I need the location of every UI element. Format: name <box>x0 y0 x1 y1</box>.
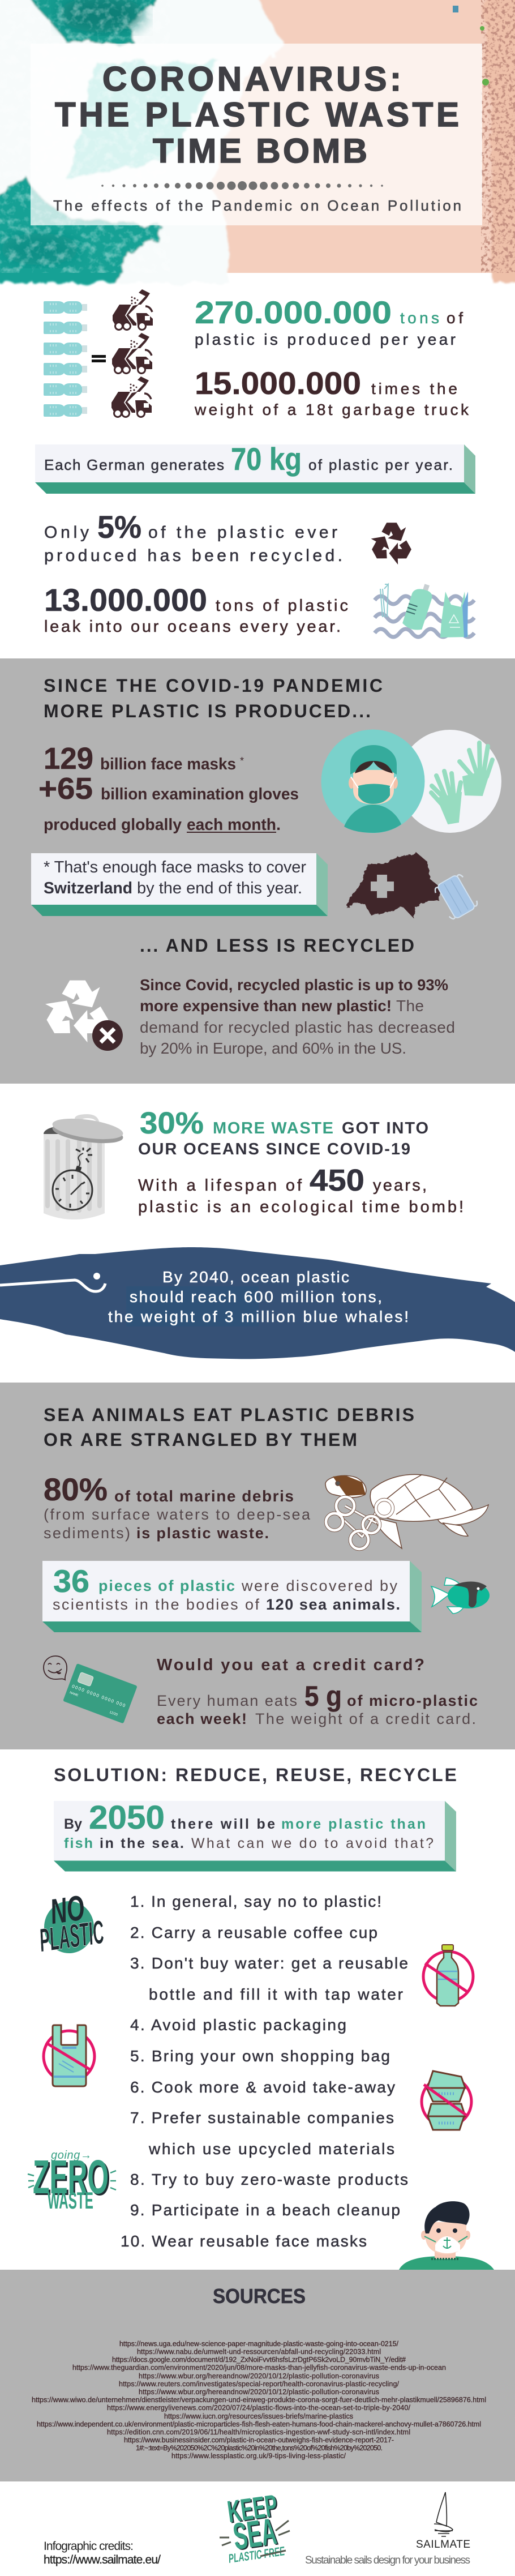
heading: solution: SOLUTION: REDUCE, REUSE, RECYCLE <box>54 1765 457 1785</box>
source links list: https://www.energylivenews.com/2020/07/24/plastic-flows-into-the-ocean-set-to-triple-by-2040/ <box>107 2404 411 2412</box>
text: 5 g of micro-plastic: of micro-plastic <box>347 1692 478 1709</box>
stat: 80% marine debris: sediments) <box>44 1525 130 1542</box>
callout: 36 pieces of plastic: were discovered by <box>241 1577 397 1594</box>
stat: face masks <box>44 742 244 776</box>
stat: 450 years: plastic is an ecological time bomb! <box>138 1198 464 1216</box>
panel: sources <box>0 2270 515 2481</box>
list: ten solution tips <box>121 1893 408 2250</box>
text: recycled plastic cost: more expensive than new plastic! <box>140 997 392 1015</box>
source links list: https://www.theguardian.com/environment/2020/jun/08/more-masks-than-jellyfish-coronavirus-waste-ends-up-in-ocean <box>72 2364 446 2372</box>
icon: going zero waste badge <box>28 2149 116 2214</box>
text: produced globally: each month <box>187 816 276 834</box>
text: infographic credits: Infographic credits: <box>44 2540 134 2553</box>
list: ten solution tips: which use upcycled materials <box>148 2140 394 2158</box>
equals sign <box>92 355 106 362</box>
list: ten solution tips: 3. Don't buy water: get a reusable <box>130 1954 408 1972</box>
text: produced globally: produced globally <box>44 816 182 834</box>
icon: turtle in plastic rings <box>325 1474 488 1549</box>
stat: 450 years <box>138 1163 464 1216</box>
source links list: https://www.wbur.org/hereandnow/2020/10/12/plastic-pollution-coronavirus <box>139 2388 379 2396</box>
icon: no take-away boxes <box>422 2071 471 2130</box>
text: produced globally: . <box>276 816 281 834</box>
heading: and less is recycled: ... AND LESS IS RECYCLED <box>140 935 414 956</box>
stat: 30% more waste: GOT INTO <box>342 1119 428 1137</box>
stat: 80% marine debris <box>44 1471 311 1542</box>
icon: going zero waste badge: ZERO <box>33 2150 109 2203</box>
callout: 36 pieces of plastic: pieces of plastic <box>98 1577 235 1594</box>
source links list: https://www.reuters.com/investigates/special-report/health-coronavirus-plastic-recycling/ <box>119 2380 400 2388</box>
text: recycled plastic cost: Since Covid, recycled plastic is up to 93% <box>140 976 448 994</box>
text: 5 g of micro-plastic <box>157 1680 478 1727</box>
callout: 36 pieces of plastic: 120 sea animals. <box>266 1596 400 1613</box>
logo decoration: burst lines <box>220 2521 290 2556</box>
dotted divider <box>101 181 383 190</box>
title: THE PLASTIC WASTE <box>55 96 459 134</box>
callout: 36 pieces of plastic <box>42 1561 422 1632</box>
stat: 30% more waste <box>138 1106 428 1158</box>
text: recycled plastic cost: by 20% in Europe, and 60% in the US. <box>140 1039 406 1057</box>
icon: going zero waste badge: ZERO <box>35 2152 110 2205</box>
stat: only 5% recycled: Only <box>44 523 89 542</box>
source links list: https://www.wbur.org/hereandnow/2020/10/12/plastic-pollution-coronavirus <box>139 2372 379 2380</box>
stat: gloves: +65 <box>38 772 93 806</box>
icon: trash can with time bomb <box>44 1114 125 1219</box>
source links list: 1#:~:text=By%202050%2C%20plastic%20in%20the,tons%20of%20fish%20by%202050. <box>136 2444 383 2452</box>
stat: 13.000.000 tons: 13.000.000 <box>44 582 207 618</box>
heading: sea animals: OR ARE STRANGLED BY THEM <box>44 1430 357 1450</box>
icon: credit card <box>63 1663 138 1723</box>
stat: 270.000.000 tons: tons <box>400 309 439 327</box>
text: 5 g of micro-plastic: 5 g <box>304 1680 342 1712</box>
stat: 30% more waste: 30% <box>140 1106 204 1140</box>
icon: no plastic bag <box>44 2025 95 2086</box>
callout: by 2050: 2050 <box>89 1799 165 1836</box>
stat: 30% more waste: MORE WASTE <box>213 1119 333 1137</box>
heading: eat a credit card: Would you eat a credit card? <box>157 1656 424 1674</box>
icon: crossed-out recycling <box>40 981 123 1051</box>
callout: by 2050 <box>54 1799 456 1872</box>
text: Sailmate tagline: Sustainable sails design for your business <box>305 2554 470 2566</box>
icon: going zero waste badge: going→ <box>51 2149 92 2162</box>
stat: 80% marine debris: 80% <box>44 1471 108 1507</box>
logo: Sailmate boat <box>434 2492 453 2536</box>
text: 5 g of micro-plastic: each week! <box>157 1710 247 1727</box>
list: ten solution tips: 8. Try to buy zero-waste products <box>130 2171 408 2188</box>
panel: since Covid more plastic <box>0 658 515 1084</box>
stat: 270.000.000 tons <box>195 294 463 348</box>
stat: 15.000.000 times: 15.000.000 <box>195 365 361 401</box>
source links list: https://www.lessplastic.org.uk/9-tips-living-less-plastic/ <box>171 2452 346 2460</box>
icon: gloves circle <box>398 730 501 833</box>
hero: beach and ocean photo <box>0 0 515 283</box>
panel: sea animals <box>0 1383 515 1749</box>
callout: 36 pieces of plastic: 36 <box>53 1563 89 1599</box>
stat: only 5% recycled: of the plastic ever <box>148 523 337 542</box>
logo: keep the sea plastic free: KEEP <box>225 2488 280 2529</box>
callout: 70 kg per German: 70 kg <box>231 441 302 477</box>
heading: sea animals: SEA ANIMALS EAT PLASTIC DEBRIS <box>44 1405 414 1425</box>
callout: cover Switzerland: by the end of this year. <box>137 879 302 897</box>
logo: keep the sea plastic free: PLASTIC FREE <box>228 2544 286 2566</box>
stat: 270.000.000 tons: plastic is produced per year <box>195 331 456 348</box>
stat: face masks: billion face masks <box>100 755 236 773</box>
stat: 450 years: years, <box>373 1176 427 1195</box>
stat: 80% marine debris: of total marine debris <box>114 1487 294 1505</box>
callout: by 2050: there will be <box>171 1816 275 1832</box>
list: ten solution tips: 6. Cook more & avoid take-away <box>130 2078 395 2096</box>
heading: since the pandemic: SINCE THE COVID-19 PANDEMIC <box>44 675 383 696</box>
list: ten solution tips: 2. Carry a reusable coffee cup <box>130 1924 377 1941</box>
subtitle: The effects of the Pandemic on Ocean Pollution <box>53 197 461 214</box>
icon: three garbage trucks <box>111 289 153 417</box>
icon: credit card: 0000 0000 0000 000 <box>71 1684 126 1708</box>
text: by 2040 ocean plastic: the weight of 3 million blue whales! <box>108 1308 409 1325</box>
hero translucent panel <box>31 44 482 225</box>
heading: sources: SOURCES <box>213 2284 306 2308</box>
callout: cover Switzerland <box>31 853 328 916</box>
stat: 30% more waste: OUR OCEANS SINCE COVID-19 <box>138 1140 410 1158</box>
stat: 450 years: 450 <box>310 1163 364 1197</box>
icon: six plastic bottles <box>44 301 87 417</box>
text: by 2040 ocean plastic <box>108 1268 409 1325</box>
title <box>55 60 459 170</box>
callout: cover Switzerland: * That's enough face masks to cover <box>44 858 306 876</box>
callout: by 2050: By <box>64 1816 82 1832</box>
text: 5 g of micro-plastic: The weight of a credit card. <box>255 1710 476 1727</box>
callout: 36 pieces of plastic: scientists in the bodies of <box>53 1596 259 1613</box>
list: ten solution tips: 7. Prefer sustainable companies <box>130 2109 394 2126</box>
stat: 13.000.000 tons <box>44 582 348 636</box>
list: ten solution tips: 9. Participate in a beach cleanup <box>130 2201 400 2219</box>
stat: 13.000.000 tons: tons of plastic <box>216 597 348 615</box>
title: CORONAVIRUS: <box>102 60 401 98</box>
icon: plastic waste in waves <box>375 581 474 637</box>
icon: no to plastic badge: NO <box>48 1888 87 1932</box>
text: recycled plastic cost <box>140 976 455 1057</box>
heading: since the pandemic <box>44 675 383 721</box>
source links list: https://www.nabu.de/umwelt-und-ressourcen/abfall-und-recycling/22033.html <box>137 2348 381 2356</box>
icon: recycle symbol <box>367 523 414 567</box>
stat: 15.000.000 times: weight of a 18t garbage truck <box>194 401 469 418</box>
list: ten solution tips: 4. Avoid plastic packaging <box>130 2016 346 2034</box>
icon: credit card: 12/20 <box>109 1711 118 1717</box>
stat: face masks: 129 <box>44 742 93 776</box>
stat: 270.000.000 tons: 270.000.000 <box>195 294 392 330</box>
source links list: https://news.uga.edu/new-science-paper-magnitude-plastic-waste-going-into-ocean-0215/ <box>119 2340 399 2348</box>
stat: gloves: billion examination gloves <box>101 785 299 803</box>
callout: by 2050: in the sea. <box>100 1835 184 1851</box>
source links list <box>32 2340 486 2460</box>
whale illustration <box>0 1247 515 1359</box>
stat: only 5% recycled: 5% <box>97 509 141 545</box>
text: recycled plastic cost: The <box>396 997 424 1015</box>
icon: going zero waste badge: WASTE <box>48 2187 93 2214</box>
icon: no to plastic badge <box>33 1886 106 1959</box>
stat: 80% marine debris: is plastic waste. <box>136 1525 269 1542</box>
heading: since the pandemic: MORE PLASTIC IS PRODUCED... <box>44 701 371 721</box>
stat: 15.000.000 times: times the <box>371 380 457 397</box>
icon: Switzerland map <box>346 853 440 918</box>
icon: man wearing patterned mask <box>399 2201 494 2270</box>
text: Sailmate wordmark: SAILMATE <box>416 2539 470 2551</box>
title: TIME BOMB <box>153 132 367 170</box>
list: ten solution tips: 5. Bring your own shopping bag <box>130 2047 390 2065</box>
text: by 2040 ocean plastic: should reach 600 million tons, <box>130 1288 382 1306</box>
logo: keep the sea plastic free: KEEP <box>226 2489 281 2530</box>
text: PLASTIC <box>37 1914 106 1959</box>
logo: keep the sea plastic free: SEA <box>232 2511 280 2558</box>
logo: keep the sea plastic free <box>220 2488 286 2566</box>
stat: 13.000.000 tons: leak into our oceans every year. <box>44 618 341 636</box>
stat: gloves <box>38 772 299 806</box>
text: infographic credits: https://www.sailmate.eu/ <box>44 2553 161 2566</box>
callout: by 2050: more plastic than <box>281 1816 426 1832</box>
callout: 70 kg per German <box>35 441 475 494</box>
callout: by 2050: What can we do to avoid that? <box>191 1835 434 1851</box>
text: 5 g of micro-plastic: Every human eats <box>157 1692 297 1709</box>
icon: smiley speech bubble <box>44 1656 67 1680</box>
callout: by 2050: fish <box>64 1835 93 1851</box>
text: by 2040 ocean plastic: By 2040, ocean plastic <box>162 1268 349 1286</box>
text: infographic credits <box>44 2540 161 2566</box>
heading: sea animals <box>44 1405 414 1450</box>
icon: medical worker in mask <box>321 729 424 833</box>
source links list: https://www.wiwo.de/unternehmen/dienstleister/verpackungen-und-einweg-produkte-corona-sorgt-fuer-deutlich-mehr-plastikmuell/25896876.html <box>32 2396 486 2404</box>
logo: keep the sea plastic free: SEA <box>230 2510 279 2557</box>
stat: only 5% recycled: produced has been recycled. <box>44 546 342 565</box>
stat: face masks: * <box>240 755 244 767</box>
stat: only 5% recycled <box>44 509 342 565</box>
icon: credit card: NAME <box>69 1691 79 1697</box>
text: recycled plastic cost: demand for recycled plastic has decreased <box>140 1019 455 1036</box>
callout: 70 kg per German: Each German generates <box>44 456 224 473</box>
callout: 70 kg per German: of plastic per year. <box>308 456 453 473</box>
stat: 80% marine debris: (from surface waters to deep-sea <box>44 1506 311 1523</box>
source links list: https://docs.google.com/document/d/192_ZxNoiFvvt6hsfsLzrDgtP6Sk2voLD_90mvbTiN_Y/edit# <box>112 2356 406 2364</box>
stat: 450 years: With a lifespan of <box>138 1176 302 1195</box>
stat: 15.000.000 times <box>194 365 469 418</box>
icon: tropical fish <box>431 1578 490 1614</box>
source links list: https://www.businessinsider.com/plastic-in-ocean-outweighs-fish-evidence-report-2017- <box>124 2436 394 2444</box>
icon: surgical face mask <box>433 872 479 921</box>
stat: 270.000.000 tons: of <box>447 309 463 327</box>
callout: cover Switzerland: Switzerland <box>44 879 132 897</box>
icon: no plastic bottle <box>423 1945 473 2006</box>
source links list: https://edition.cnn.com/2019/06/11/health/microplastics-ingestion-wwf-study-scn-intl/index.html <box>107 2428 410 2436</box>
list: ten solution tips: 10. Wear reusable face masks <box>121 2232 367 2250</box>
list: ten solution tips: bottle and fill it with tap water <box>149 1986 403 2003</box>
text: produced globally <box>44 816 281 834</box>
list: ten solution tips: 1. In general, say no to plastic! <box>130 1893 381 1910</box>
source links list: https://www.independent.co.uk/environment/plastic-microparticles-fish-flesh-eaten-humans-food-chain-mackerel-anchovy-mullet-a7860726.html <box>37 2420 481 2428</box>
source links list: https://www.iucn.org/resources/issues-briefs/marine-plastics <box>164 2412 353 2420</box>
